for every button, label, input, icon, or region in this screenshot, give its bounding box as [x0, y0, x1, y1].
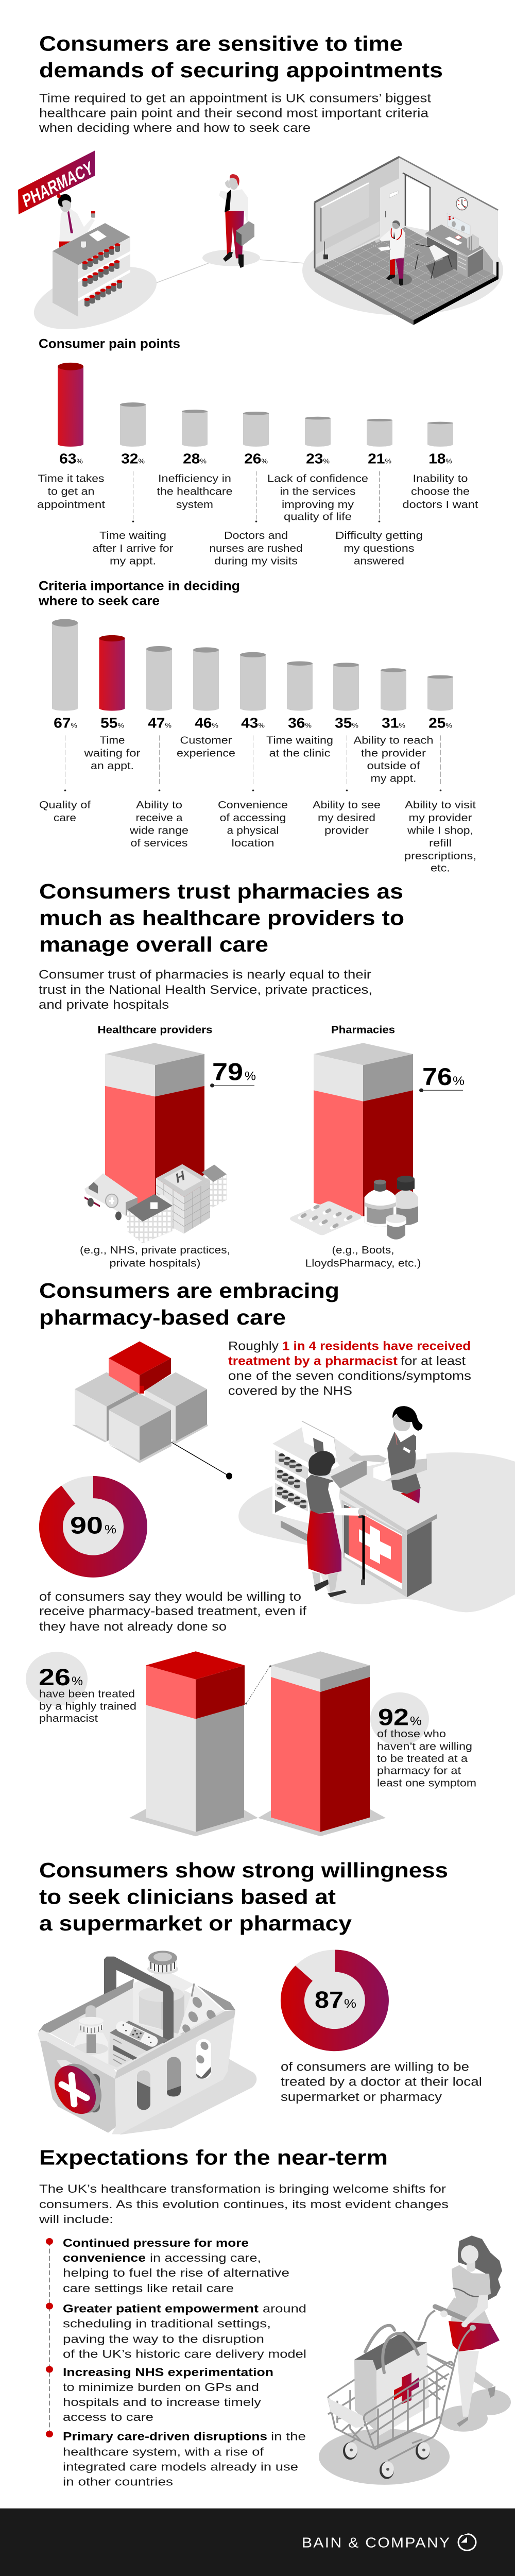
percent values: 55%	[100, 715, 124, 731]
section 4: supermarket clinicians	[38, 1858, 482, 2134]
labels upper row: Inability to	[413, 472, 468, 484]
callout: 92%: least one symptom	[377, 1777, 476, 1789]
callout: 92%	[370, 1692, 476, 1789]
bullet: NHS experimentation: to minimize burden on GPs and	[63, 2381, 259, 2394]
callout: 92%: %	[410, 1714, 422, 1728]
intro text: Time required to get an appointment is UK consumers’ biggest	[39, 91, 431, 105]
donut caption text: supermarket or pharmacy	[281, 2090, 442, 2104]
percent values: 28%	[183, 451, 207, 467]
column heading: pharmacies: Pharmacies	[331, 1024, 395, 1036]
labels lower row: prescriptions,	[404, 850, 476, 862]
illustration: pills and bottles	[290, 1176, 418, 1240]
donut: 87%: 87	[315, 1987, 344, 2013]
value: 76%: 76	[422, 1063, 452, 1091]
labels lower row: Time waiting	[99, 530, 166, 541]
block chart: pharmacies 76%	[314, 1043, 413, 1216]
donut caption text: receive pharmacy-based treatment, even if	[39, 1604, 307, 1618]
title: a supermarket or pharmacy	[39, 1911, 352, 1935]
labels upper row: the healthcare	[157, 485, 232, 497]
heading: Consumer pain points	[39, 336, 180, 351]
labels upper row: an appt.	[91, 760, 134, 772]
heading	[38, 578, 240, 608]
labels lower row: receive a	[136, 812, 183, 824]
title: Consumers are embracing	[39, 1279, 339, 1302]
labels upper row: choose the	[411, 485, 470, 497]
logo wordmark: BAIN & COMPANY	[302, 2535, 450, 2551]
bullet: NHS experimentation	[63, 2366, 273, 2424]
callout: 92%: pharmacy for at	[377, 1765, 461, 1776]
callout: 92%: to be treated at a	[377, 1752, 468, 1765]
donut: 90%: 90	[70, 1513, 103, 1539]
labels lower row: my provider	[409, 812, 472, 824]
value: 79%: 79	[212, 1059, 243, 1086]
percent values: 32%	[121, 451, 145, 467]
labels lower row: nurses are rushed	[209, 543, 302, 554]
intro text	[39, 91, 431, 135]
column heading: healthcare providers: Healthcare providers	[98, 1024, 213, 1036]
heading: Criteria importance in deciding	[39, 578, 240, 593]
connector line	[171, 1442, 232, 1480]
bullet: primary care disruptions: Primary care-driven disruptions	[63, 2430, 267, 2443]
value: 76%	[419, 1063, 465, 1092]
caption: pharmacies	[305, 1244, 421, 1269]
bullet: patient empowerment: Greater patient empowerment	[63, 2302, 259, 2315]
labels upper row: in the services	[280, 485, 355, 497]
donut: 87%: %	[344, 1997, 356, 2011]
donut caption text	[281, 2060, 482, 2104]
donut: 87%	[281, 1950, 389, 2051]
caption: healthcare providers: private hospitals)	[109, 1257, 200, 1269]
illustration: woman with shopping cart	[319, 2235, 511, 2485]
donut caption text	[39, 1590, 307, 1634]
caption: pharmacies: LloydsPharmacy, etc.)	[305, 1257, 421, 1269]
labels lower row: Ability to visit	[405, 799, 476, 811]
bullet: primary care disruptions: integrated care models already in use	[63, 2460, 298, 2473]
labels lower row: Quality of	[39, 799, 91, 811]
intro text: consumers. As this evolution continues, its most evident changes	[39, 2198, 449, 2211]
labels lower row	[39, 799, 476, 874]
caption: pharmacies: (e.g., Boots,	[332, 1244, 394, 1256]
section 1: time demands	[18, 32, 503, 342]
labels lower row: care	[54, 812, 76, 824]
bullet: primary care disruptions	[63, 2430, 306, 2488]
section: criteria importance	[38, 578, 476, 874]
section 2: trust in pharmacies	[39, 879, 465, 1269]
bullet: convenience: convenience	[63, 2251, 146, 2264]
bullet: patient empowerment	[63, 2302, 306, 2360]
title: much as healthcare providers to	[39, 906, 404, 929]
intro text: will include:	[39, 2213, 113, 2226]
title	[39, 1279, 339, 1329]
title: Consumers trust pharmacies as	[39, 879, 403, 903]
callout: 26%: %	[72, 1674, 83, 1688]
bullet: convenience: helping to fuel the rise of alternative	[63, 2266, 289, 2279]
labels lower row: while I shop,	[407, 824, 473, 836]
title: demands of securing appointments	[39, 58, 443, 82]
intro text: The UK’s healthcare transformation is bringing welcome shifts for	[39, 2182, 446, 2195]
percent values: 26%	[244, 451, 268, 467]
callout text: 1 in 4 residents: treatment by a pharmacist	[228, 1354, 398, 1368]
section: consumer pain points	[37, 336, 478, 567]
section 3: pharmacy-based care	[26, 1279, 515, 1836]
labels upper row: experience	[177, 747, 235, 759]
labels upper row: quality of life	[284, 511, 352, 522]
callout: 26%: 26	[39, 1664, 71, 1690]
callout: 92%: of those who	[377, 1728, 446, 1740]
labels upper row: my appt.	[371, 772, 416, 784]
timeline dashes and bullets	[46, 2238, 53, 2437]
labels upper row: Time	[100, 734, 125, 746]
leader lines	[132, 471, 380, 522]
percent values: 47%	[148, 715, 171, 731]
callout: 92%: 92	[378, 1704, 409, 1730]
value: 79%	[210, 1059, 256, 1088]
percent values: 18%	[428, 451, 452, 467]
title: Consumers are sensitive to time	[39, 32, 403, 55]
illustration: cubes one in four	[72, 1342, 208, 1463]
block chart: healthcare providers 79%	[105, 1043, 204, 1212]
labels upper row: appointment	[37, 499, 105, 511]
labels lower row: provider	[324, 824, 369, 836]
value: 79%: %	[245, 1069, 256, 1083]
bullet: patient empowerment: scheduling in traditional settings,	[63, 2317, 271, 2330]
isometric bars	[129, 1651, 386, 1836]
illustration: pharmacy counter	[26, 194, 165, 342]
percent values: 31%	[382, 715, 405, 731]
labels upper row: Inefficiency in	[158, 472, 231, 484]
callout text: 1 in 4 residents: Roughly	[228, 1339, 279, 1353]
labels lower row: after I arrive for	[93, 543, 173, 554]
labels upper row: system	[176, 499, 213, 511]
cylinder bar chart	[58, 363, 453, 447]
percent values: 35%	[335, 715, 358, 731]
labels lower row: wide range	[129, 824, 188, 836]
percent values	[59, 451, 452, 467]
labels upper row: waiting for	[83, 747, 140, 759]
donut caption text: they have not already done so	[39, 1620, 227, 1634]
labels upper row: to get an	[47, 485, 94, 497]
labels lower row: etc.	[431, 862, 450, 874]
labels lower row: Difficulty getting	[335, 530, 423, 541]
callout: 92%: haven’t are willing	[377, 1740, 472, 1752]
bullet: NHS experimentation: Increasing NHS experimentation	[63, 2366, 273, 2379]
intro text	[39, 968, 372, 1012]
callout: 26%: have been treated	[39, 1688, 135, 1700]
labels upper row: Customer	[180, 734, 232, 746]
labels upper row: Lack of confidence	[267, 472, 368, 484]
percent values: 23%	[306, 451, 330, 467]
labels upper row: Ability to reach	[353, 734, 434, 746]
bullet: primary care disruptions: healthcare system, with a rise of	[63, 2445, 264, 2458]
labels lower row: my desired	[318, 812, 375, 824]
bullet: convenience: in accessing care,	[150, 2251, 261, 2264]
bullet: NHS experimentation: hospitals and to increase timely	[63, 2396, 261, 2409]
percent values	[54, 715, 452, 731]
title: manage overall care	[39, 933, 268, 956]
title: to seek clinicians based at	[39, 1885, 336, 1908]
illustration: medical shopping basket	[38, 1951, 256, 2134]
intro text: Consumer trust of pharmacies is nearly equal to their	[39, 968, 371, 982]
labels lower row: Ability to	[136, 799, 182, 811]
bullet: primary care disruptions: in other countries	[63, 2475, 173, 2488]
bullet: patient empowerment: of the UK’s historic care delivery model	[63, 2347, 306, 2360]
donut caption text: of consumers are willing to be	[281, 2060, 469, 2074]
value: 76%: %	[453, 1074, 465, 1088]
labels upper row	[83, 734, 433, 784]
section 5: expectations	[39, 2146, 511, 2488]
title: Consumers show strong willingness	[39, 1858, 448, 1882]
labels lower row: answered	[354, 555, 404, 567]
intro text: when deciding where and how to seek care	[39, 121, 311, 135]
title	[39, 1858, 448, 1935]
illustration: ambulance and hospitals: H	[175, 1168, 185, 1187]
percent values: 46%	[195, 715, 218, 731]
bullet: NHS experimentation: access to care	[63, 2411, 153, 2424]
labels lower row	[93, 530, 423, 567]
labels lower row: a physical	[227, 824, 279, 836]
donut: 90%	[39, 1476, 147, 1578]
labels upper row: the provider	[361, 747, 426, 759]
footer bar	[0, 2509, 515, 2576]
bullet: convenience: Continued pressure for more	[63, 2236, 249, 2249]
labels upper row: outside of	[367, 760, 420, 772]
intro text	[39, 2182, 449, 2226]
bullet: patient empowerment: around	[263, 2302, 306, 2315]
labels lower row: Doctors and	[224, 530, 288, 541]
callout: 26%: by a highly trained	[39, 1700, 136, 1712]
illustration: doctor's office room	[302, 157, 503, 325]
bullet: convenience: care settings like retail care	[63, 2282, 234, 2295]
callout text: 1 in 4 residents	[228, 1339, 471, 1398]
callout text: 1 in 4 residents: one of the seven conditions/symptoms	[228, 1369, 471, 1383]
callout: 26%	[26, 1652, 136, 1724]
labels upper row: Time it takes	[38, 472, 104, 484]
labels lower row: of accessing	[220, 812, 286, 824]
heading: where to seek care	[38, 593, 160, 608]
bullet: patient empowerment: paving the way to the disruption	[63, 2332, 264, 2345]
labels upper row: Time waiting	[266, 734, 333, 746]
intro text: and private hospitals	[39, 998, 169, 1012]
leader lines	[64, 735, 441, 791]
labels lower row: during my visits	[214, 555, 298, 567]
illustration: customer at pharmacy counter	[238, 1406, 515, 1612]
bullet: primary care disruptions: in the	[271, 2430, 306, 2443]
title: pharmacy-based care	[39, 1306, 286, 1329]
intro text: healthcare pain point and their second most important criteria	[39, 106, 429, 121]
bullet: convenience	[63, 2236, 289, 2295]
labels lower row: my questions	[344, 543, 414, 554]
title	[39, 32, 443, 82]
callout: 26%: pharmacist	[39, 1713, 98, 1724]
labels lower row: of services	[130, 837, 187, 849]
labels lower row: Ability to see	[313, 799, 381, 811]
illustration: man with briefcase	[202, 174, 260, 268]
title	[39, 879, 404, 956]
pharmacy sign	[18, 150, 95, 214]
caption: healthcare providers: (e.g., NHS, private practices,	[80, 1244, 230, 1256]
logo mark	[458, 2533, 476, 2550]
percent values: 43%	[241, 715, 265, 731]
labels lower row: location	[232, 837, 274, 849]
percent values: 21%	[368, 451, 391, 467]
pharmacy sign: PHARMACY	[21, 158, 95, 212]
title: Expectations for the near-term	[39, 2146, 388, 2169]
connector lines	[156, 260, 304, 283]
labels lower row: my appt.	[110, 555, 156, 567]
labels upper row	[37, 472, 478, 522]
percent values: 25%	[428, 715, 452, 731]
labels upper row: at the clinic	[269, 747, 331, 759]
labels lower row: refill	[429, 837, 452, 849]
labels upper row: improving my	[282, 499, 354, 511]
intro text: trust in the National Health Service, private practices,	[39, 982, 372, 997]
callout text: 1 in 4 residents: 1 in 4 residents have received	[282, 1339, 471, 1353]
labels lower row: Convenience	[218, 799, 288, 811]
percent values: 36%	[288, 715, 312, 731]
illustration: ambulance and hospitals	[84, 1164, 227, 1243]
percent values: 63%	[59, 451, 83, 467]
percent values: 67%	[54, 715, 77, 731]
donut caption text: of consumers say they would be willing to	[39, 1590, 301, 1604]
callout text: 1 in 4 residents: for at least	[401, 1354, 466, 1368]
labels upper row: doctors I want	[402, 499, 478, 511]
callout text: 1 in 4 residents: covered by the NHS	[228, 1384, 352, 1398]
donut: 90%: %	[105, 1522, 116, 1536]
cylinder bar chart	[52, 619, 453, 711]
caption: healthcare providers	[80, 1244, 230, 1269]
donut caption text: treated by a doctor at their local	[281, 2075, 482, 2089]
